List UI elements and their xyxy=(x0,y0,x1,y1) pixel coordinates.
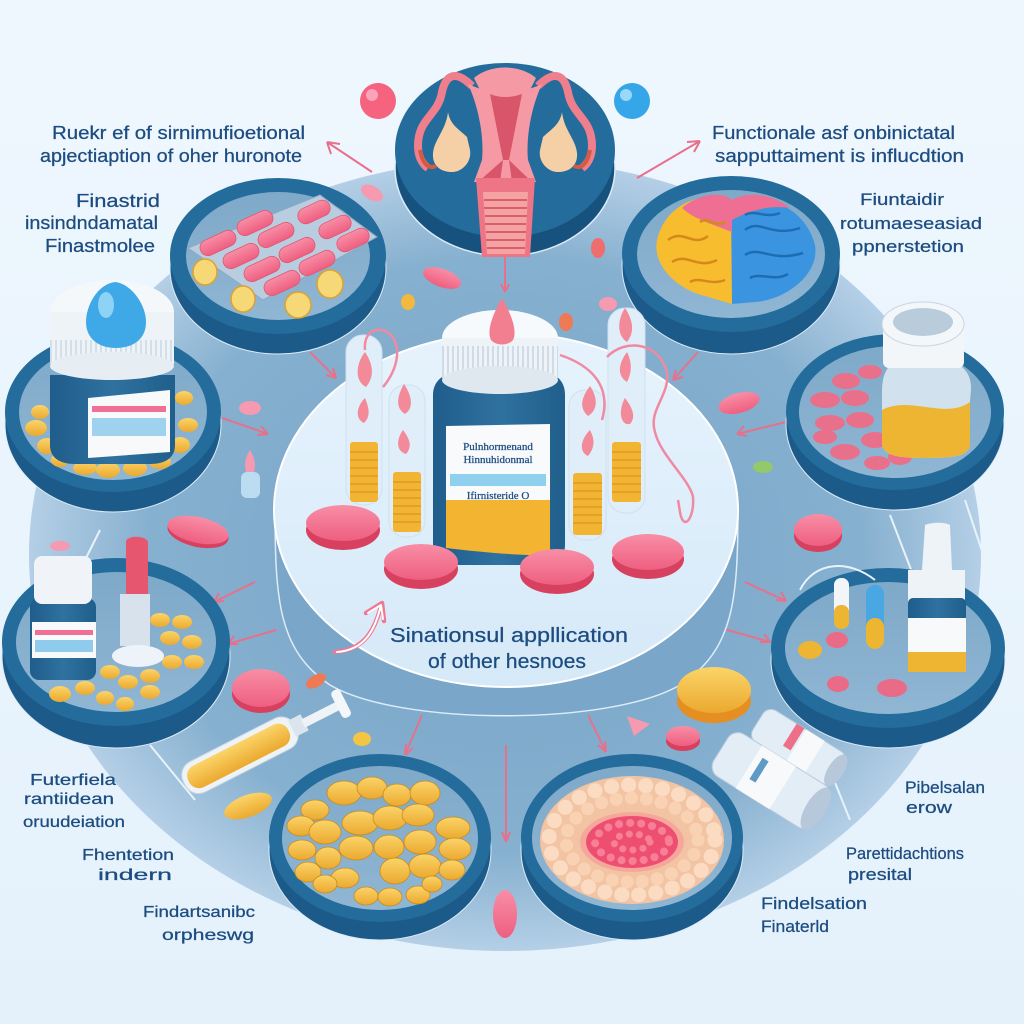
text: right label xyxy=(840,190,982,256)
icon: gold capsule pile xyxy=(287,777,471,906)
decorative spheres xyxy=(360,83,650,119)
icon: syringe xyxy=(177,686,353,799)
icon: small vial xyxy=(241,450,260,498)
text: lower left labels: indern xyxy=(98,867,172,884)
text: lower left labels: Findartsanibc xyxy=(143,904,255,921)
text: top left heading xyxy=(40,123,305,166)
icon: pink tablets xyxy=(306,505,684,594)
icon: medicine jar xyxy=(50,280,175,464)
icon: curved arrow xyxy=(335,603,384,652)
panel: central plate xyxy=(274,298,738,716)
icon: uterus xyxy=(418,68,592,257)
icon: central bottle: Hinnuhidonmal xyxy=(463,454,533,466)
text: top right heading: sapputtaiment is influcdtion xyxy=(715,146,964,166)
connector lines and arrows xyxy=(214,141,786,842)
icon: applicator xyxy=(112,537,164,667)
text: lower left labels: Fhentetion xyxy=(82,847,174,864)
text: lower left labels: rantiidean xyxy=(24,791,114,808)
text: lower left labels xyxy=(23,772,255,944)
text: lower right labels: presital xyxy=(848,865,912,884)
text: right label: ppnerstetion xyxy=(852,237,964,256)
text: left label finastrid: Finastmolee xyxy=(45,236,155,256)
panel: pink tablets and jar xyxy=(786,302,1004,510)
icon: right ampoules xyxy=(560,308,693,540)
spokes xyxy=(85,500,985,820)
panel: blister pack xyxy=(170,178,386,354)
icon: gold capsules xyxy=(25,391,198,478)
icon: vials xyxy=(798,566,907,697)
icon: gold tablets xyxy=(49,613,204,711)
text: top left heading: apjectiaption of oher huronote xyxy=(40,146,302,166)
text: right label: Fiuntaidir xyxy=(860,190,944,209)
text: lower right labels xyxy=(761,778,985,936)
icon: brain xyxy=(656,195,815,304)
panel: gold capsule dish xyxy=(269,754,491,940)
text: lower left labels: oruudeiation xyxy=(23,814,125,831)
icon: small bottle xyxy=(30,556,96,680)
icon: left ampoules xyxy=(346,330,425,537)
label text: Pulnhormenand xyxy=(463,441,533,453)
text: lower right labels: Parettidachtions xyxy=(846,844,964,863)
panel: reproductive organ xyxy=(395,63,615,257)
panel: skin tissue dish xyxy=(521,754,743,940)
panel: jar with blue drop xyxy=(5,280,221,512)
text: lower right labels: Finaterld xyxy=(761,917,829,936)
text: lower left labels: Futerfiela xyxy=(30,772,116,789)
central caption: of other hesnoes xyxy=(428,651,586,673)
text: left label finastrid: insindndamatal xyxy=(25,213,158,233)
text: lower right labels: Findelsation xyxy=(761,894,867,913)
central caption xyxy=(390,625,628,673)
icon: glass jar xyxy=(882,302,971,458)
panel: vials and dropper xyxy=(771,523,1005,748)
icon: dropper bottle xyxy=(908,523,966,672)
panel: bottle, lipstick and capsules xyxy=(2,537,230,748)
icon: glass vials xyxy=(708,706,853,835)
icon: tablets xyxy=(810,365,912,470)
panel: brain xyxy=(622,176,840,354)
text: top right heading xyxy=(712,123,964,166)
central caption: Sinationsul appllication xyxy=(390,625,628,647)
floating pills xyxy=(50,181,842,938)
text: left label finastrid: Finastrid xyxy=(76,191,160,211)
text: right label: rotumaeseasiad xyxy=(840,214,982,233)
icon: skin cross-section xyxy=(540,776,724,904)
text: left label finastrid xyxy=(25,191,160,256)
text: top right heading: Functionale asf onbinictatal xyxy=(712,123,955,143)
text: lower right labels: Pibelsalan xyxy=(905,778,985,797)
text: top left heading: Ruekr ef of sirnimufioetional xyxy=(52,123,305,143)
icon: blister strip xyxy=(188,195,377,300)
text: lower right labels: erow xyxy=(906,798,953,817)
icon: central bottle xyxy=(433,298,565,565)
icon: central bottle: Ifirnisteride O xyxy=(467,490,529,502)
text: lower left labels: orpheswg xyxy=(162,927,254,944)
outer disc xyxy=(29,159,981,951)
